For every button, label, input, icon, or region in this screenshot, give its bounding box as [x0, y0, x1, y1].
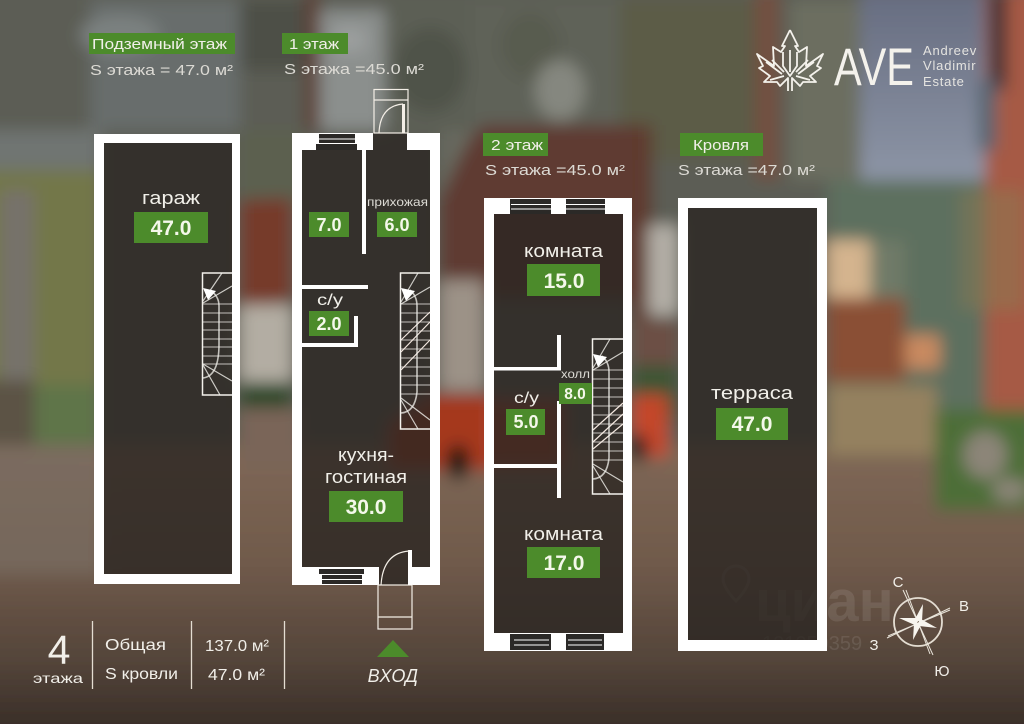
badge: garage area [134, 212, 208, 243]
label: hall: холл [561, 367, 590, 381]
heading: underground floor: Подземный этаж [92, 36, 227, 53]
label: room: комната [524, 524, 604, 544]
bottom windows [510, 634, 604, 650]
number: floors: 4 [48, 627, 70, 673]
labels: compass directions: З [869, 637, 879, 654]
badge: kitchen-living area: 30.0 [346, 496, 386, 519]
text: Andreev Vladimir Estate: Andreev [923, 43, 977, 58]
label: terrace: терраса [711, 383, 794, 403]
heading: first floor: 1 этаж [289, 36, 339, 53]
label: bathroom: с/у [514, 390, 539, 407]
watermark: cian: циан [755, 569, 894, 634]
interior walls [494, 335, 561, 498]
left ground [0, 385, 100, 445]
plan: second floor [484, 198, 632, 651]
panel: underground floor [89, 33, 240, 584]
right side [828, 180, 988, 410]
badge: garage area: 47.0 [151, 217, 191, 240]
stairs [400, 273, 430, 429]
panel: second floor [483, 133, 632, 651]
left trees [0, 130, 100, 190]
red car [388, 395, 490, 470]
stairs [592, 339, 623, 494]
heading: second floor [483, 133, 548, 156]
icon: maple leaf [757, 30, 823, 91]
label: garage: гараж [142, 188, 200, 208]
value: roof area: 47.0 м² [208, 667, 266, 684]
left building [240, 198, 292, 310]
text: first floor area: S этажа =45.0 м² [284, 62, 424, 78]
label: kitchen-living room line 2: гостиная [325, 467, 407, 487]
heading: roof [680, 133, 763, 156]
interior walls [302, 150, 368, 347]
badge: bathroom area [309, 311, 349, 336]
dividers [92, 621, 284, 689]
top door [374, 90, 408, 133]
heading: second floor: 2 этаж [491, 137, 543, 154]
center between plans [440, 130, 484, 205]
badge: hall area: 8.0 [564, 386, 586, 403]
badge: room area: 17.0 [544, 552, 584, 575]
badge: hallway area: 6.0 [384, 215, 410, 235]
plan: first floor [292, 90, 440, 629]
label: floors: этажа [33, 670, 83, 686]
room 7.0 badge: 7.0 [316, 215, 342, 235]
badge: kitchen-living area [329, 491, 403, 522]
badge: terrace area: 47.0 [732, 413, 772, 436]
badge: bathroom area: 5.0 [513, 412, 539, 432]
icon: compass [869, 574, 969, 680]
stairs [202, 273, 232, 395]
badge: room area [527, 547, 600, 578]
bottom door and porch [378, 550, 412, 629]
labels: compass directions: С [893, 574, 904, 591]
plan: terrace [678, 198, 827, 651]
badge: room area [527, 264, 600, 296]
badge: bathroom area [506, 409, 545, 435]
value: total area: 137.0 м² [205, 638, 270, 655]
plan: garage [94, 134, 240, 584]
label: kitchen-living room: кухня- [338, 445, 394, 465]
top window [316, 134, 357, 150]
text: Andreev Vladimir Estate [923, 43, 977, 89]
badge: hall area [559, 383, 592, 404]
label: roof area: S кровли [105, 666, 178, 683]
label: total: Общая [105, 637, 166, 654]
panel: first floor [282, 33, 440, 686]
text: underground floor area: S этажа = 47.0 м² [90, 63, 233, 79]
text: Andreev Vladimir Estate: Estate [923, 74, 965, 89]
label: hallway: прихожая [367, 195, 428, 209]
text: AVE wordmark: AVE [834, 38, 914, 97]
badge: hallway area [377, 212, 417, 237]
badge: room area: 15.0 [544, 270, 584, 293]
labels: compass directions: Ю [934, 663, 950, 680]
panel: roof [678, 133, 827, 651]
labels: compass directions [869, 574, 969, 680]
text: Andreev Vladimir Estate: Vladimir [923, 58, 976, 73]
label: room: комната [524, 241, 604, 261]
label: bathroom: с/у [317, 292, 343, 309]
badge: bathroom area: 2.0 [316, 314, 342, 334]
arrow: entrance [377, 640, 409, 657]
heading: underground floor [89, 33, 235, 54]
heading: roof: Кровля [693, 137, 749, 154]
labels: compass directions: В [959, 598, 969, 615]
bottom window [319, 569, 364, 584]
badge: terrace area [716, 408, 788, 440]
watermark: cian: 121059359 [762, 633, 862, 655]
text: second floor area: S этажа =45.0 м² [485, 163, 625, 179]
logo: AVE maple leaf [757, 30, 977, 97]
ground [0, 445, 1024, 724]
watermark: cian [723, 566, 894, 655]
top windows [510, 199, 605, 214]
label: entrance: ВХОД [368, 666, 418, 686]
text: roof area: S этажа =47.0 м² [678, 163, 815, 179]
heading: first floor [282, 33, 348, 54]
panel: summary [33, 621, 284, 689]
room 7.0 badge [309, 212, 349, 237]
